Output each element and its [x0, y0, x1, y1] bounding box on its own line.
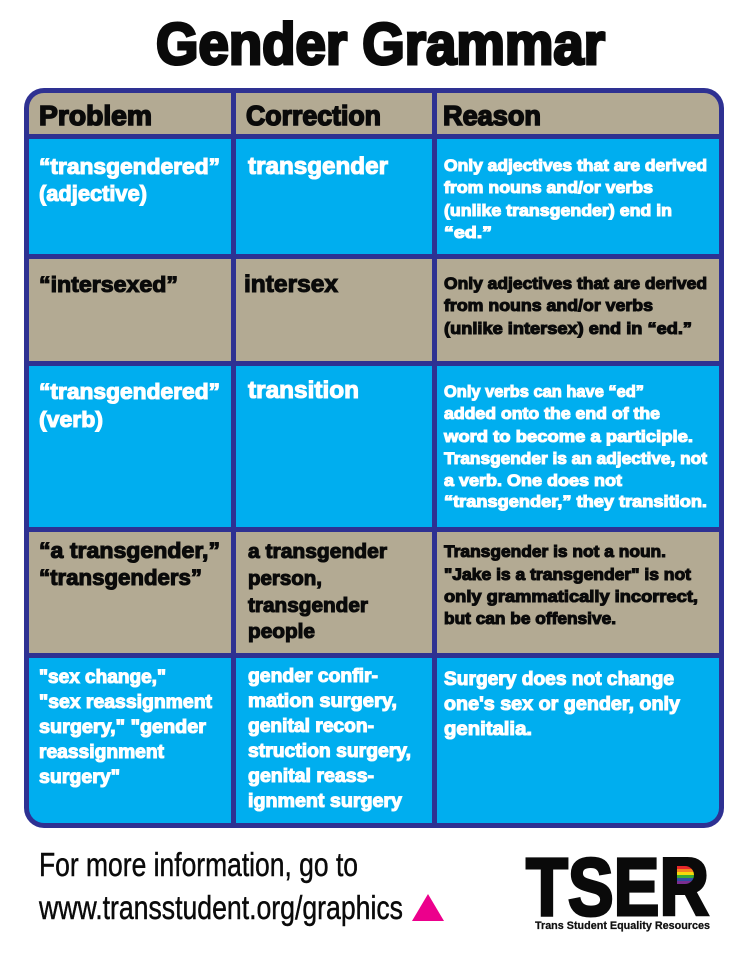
problem text: (adjective): [39, 181, 147, 206]
panel: row transgendered verb: [29, 366, 719, 527]
reason text: only grammatically incorrect,: [444, 587, 698, 606]
reason text: Transgender is not a noun.: [444, 542, 666, 561]
footer text: more information: www.transstudent.org/graphics: [38, 889, 403, 926]
reason text: "Jake is a transgender" is not: [444, 565, 691, 584]
problem text: “transgendered”: [39, 154, 220, 179]
correction text: mation surgery,: [248, 691, 397, 712]
logo: TSER: [526, 856, 710, 932]
problem text: [39, 538, 220, 590]
reason text: from nouns and/or verbs: [444, 296, 653, 315]
heading: reason: Reason: [443, 100, 541, 131]
reason text: from nouns and/or verbs: [444, 178, 653, 197]
logo: TSER: TSER: [526, 842, 709, 933]
reason text: [444, 156, 707, 242]
problem text: [39, 667, 213, 788]
correction text: ignment surgery: [248, 791, 402, 812]
correction text: gender confir-: [248, 666, 378, 687]
correction text: genital recon-: [248, 716, 374, 737]
correction text: struction surgery,: [248, 741, 411, 762]
reason text: one's sex or gender, only: [444, 694, 680, 715]
reason text: word to become a participle.: [443, 427, 693, 446]
reason text: Only adjectives that are derived: [444, 156, 707, 175]
problem text: [39, 154, 220, 206]
reason text: Surgery does not change: [444, 669, 674, 690]
problem text: "sex change,": [39, 667, 166, 688]
problem text: “transgendered”: [39, 379, 220, 404]
panel: header row: [29, 93, 719, 134]
correction text: [248, 541, 387, 643]
reason text: “transgender,” they transition.: [444, 492, 707, 511]
correction text: person,: [248, 568, 322, 590]
correction text: transition: [248, 377, 359, 404]
reason text: genitalia.: [444, 719, 532, 740]
panel: row transgendered adjective: [29, 139, 719, 254]
problem text: “transgenders”: [39, 565, 202, 590]
problem text: surgery": [39, 767, 120, 788]
reason text: but can be offensive.: [444, 609, 616, 628]
correction text: a transgender: [248, 541, 387, 563]
reason text: [444, 542, 698, 628]
correction text: transgender: [248, 153, 388, 180]
panel: grammar table: [24, 88, 724, 828]
reason text: “ed.”: [444, 223, 492, 242]
problem text: (verb): [39, 407, 103, 432]
problem text: [39, 379, 220, 432]
panel: row a transgender: [29, 532, 719, 653]
problem text: “a transgender,”: [39, 538, 220, 563]
correction text: genital reass-: [248, 766, 374, 787]
reason text: added onto the end of the: [444, 404, 660, 423]
heading: problem: Problem: [39, 100, 152, 131]
correction text: intersex: [244, 271, 339, 298]
reason text: Only adjectives that are derived: [444, 274, 707, 293]
correction text: transgender: [248, 595, 368, 617]
reason text: Only verbs can have “ed”: [444, 382, 644, 401]
correction text: people: [248, 621, 315, 643]
footer text: more information: [38, 846, 403, 926]
problem text: “intersexed”: [39, 272, 178, 297]
icon: pink triangle: [412, 894, 444, 921]
icon: rainbow in logo: [675, 866, 694, 884]
reason text: (unlike transgender) end in: [444, 201, 672, 220]
panel: row intersexed: [29, 259, 719, 361]
panel: row sex change: [29, 658, 719, 823]
reason text: [443, 382, 707, 511]
reason text: Transgender is an adjective, not: [444, 449, 707, 468]
problem text: reassignment: [39, 742, 165, 763]
problem text: surgery," "gender: [39, 717, 207, 738]
reason text: (unlike intersex) end in “ed.”: [444, 319, 692, 338]
reason text: a verb. One does not: [444, 471, 622, 490]
correction text: [248, 666, 411, 812]
reason text: [444, 669, 680, 740]
heading: correction: Correction: [246, 100, 381, 131]
footer text: more information: For more information, go to: [39, 846, 358, 883]
logo tagline: Trans Student Equality Resources: [535, 920, 710, 932]
reason text: [444, 274, 707, 338]
problem text: "sex reassignment: [39, 692, 213, 713]
title: Gender Grammar: [156, 12, 605, 77]
